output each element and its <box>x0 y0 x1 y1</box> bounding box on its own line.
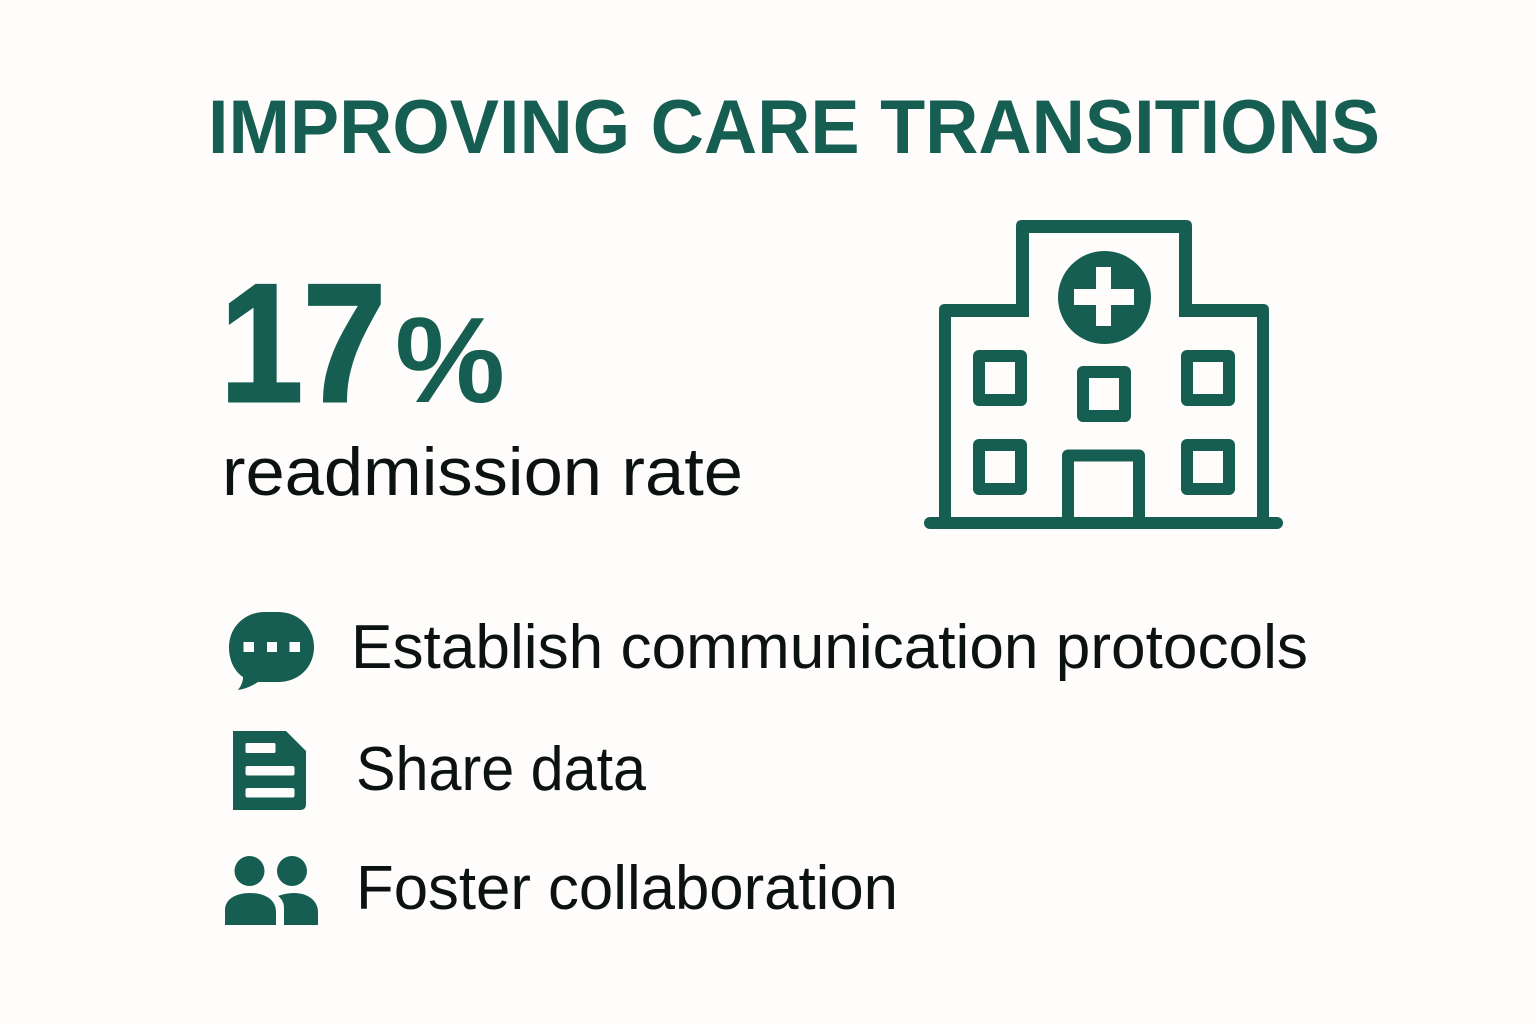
statistic: 17%: 17 <box>220 249 386 437</box>
list item: communication: Establish communication protocols <box>351 613 1308 682</box>
statistic label: readmission rate <box>222 434 743 510</box>
statistic: 17% <box>220 249 505 437</box>
icon: document <box>233 731 306 810</box>
title: IMPROVING CARE TRANSITIONS <box>208 85 1380 170</box>
statistic: 17%: % <box>395 292 505 428</box>
list item: share data: Share data <box>356 735 646 804</box>
icon: people <box>225 856 318 925</box>
icon: speech bubble <box>229 612 314 690</box>
icon: hospital <box>930 220 1277 523</box>
list item: collaboration: Foster collaboration <box>356 854 898 923</box>
